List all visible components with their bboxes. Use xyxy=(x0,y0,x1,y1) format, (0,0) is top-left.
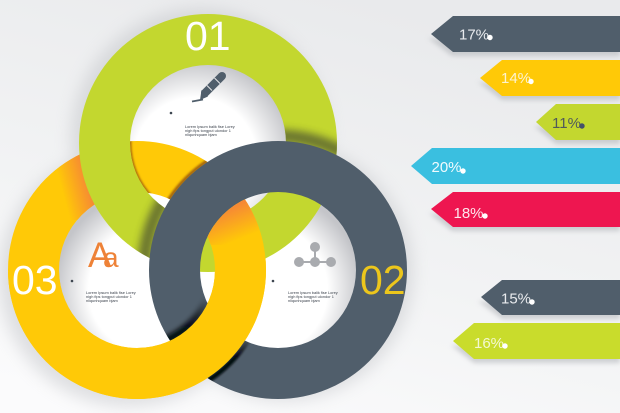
arrow shadows xyxy=(428,38,620,363)
text block: circle 02: Lorem Ipsum balik fise Lorey xyxy=(288,290,338,295)
ring drop shadows xyxy=(0,9,413,407)
green ring 01 xyxy=(79,14,337,272)
text block: circle 03: nliqunhquam bjam xyxy=(86,298,118,303)
arrow: 17%: 17% xyxy=(459,26,489,44)
white discs xyxy=(58,63,358,350)
marker dots xyxy=(71,112,274,282)
arrow: 17% xyxy=(431,16,620,52)
arrow: 15%: 15% xyxy=(501,290,531,308)
text block: circle 02: nigh fips tongput ulondor 1 xyxy=(288,294,334,299)
text block: circle 03: nigh fips tongput ulondor 1 xyxy=(86,294,132,299)
arrow: 15% xyxy=(481,280,620,315)
icon: Aa letters: A xyxy=(88,236,112,275)
number 02: 02 xyxy=(360,257,406,303)
icon: network nodes xyxy=(294,242,336,266)
arrow: 14%: 14% xyxy=(501,70,531,87)
text block: circle 02 xyxy=(288,290,338,303)
text block: circle 01 xyxy=(185,124,235,137)
yellow ring overlap in front of gray xyxy=(8,199,266,399)
gray ring 02 xyxy=(149,141,407,399)
text block: circle 02: nliqunhquam bjam xyxy=(288,298,320,303)
icon: Aa letters: a xyxy=(103,242,119,273)
arrow: 18% xyxy=(431,192,620,227)
arrow: 16%: 16% xyxy=(474,335,504,352)
text block: circle 01: nigh fips tongput ulondor 1 xyxy=(185,128,231,133)
number 03: 03 xyxy=(12,257,58,303)
arrow: 11%: 11% xyxy=(552,115,581,132)
text block: circle 03: Lorem Ipsum balik fise Lorey xyxy=(86,290,136,295)
arrow: 20% xyxy=(411,148,620,184)
arrow: 11% xyxy=(536,104,620,140)
yellow ring 03 xyxy=(8,141,266,399)
number 01: 01 xyxy=(185,13,231,59)
text block: circle 03 xyxy=(86,290,136,303)
text block: circle 01: Lorem Ipsum balik fise Lorey xyxy=(185,124,235,129)
arrow: 20%: 20% xyxy=(432,159,462,176)
arrow: 16% xyxy=(453,323,620,359)
arrow: 14% xyxy=(480,60,620,96)
icon: pen xyxy=(192,76,222,102)
arrow: 18%: 18% xyxy=(454,205,484,222)
text block: circle 01: nliqunhquam bjam xyxy=(185,132,217,137)
